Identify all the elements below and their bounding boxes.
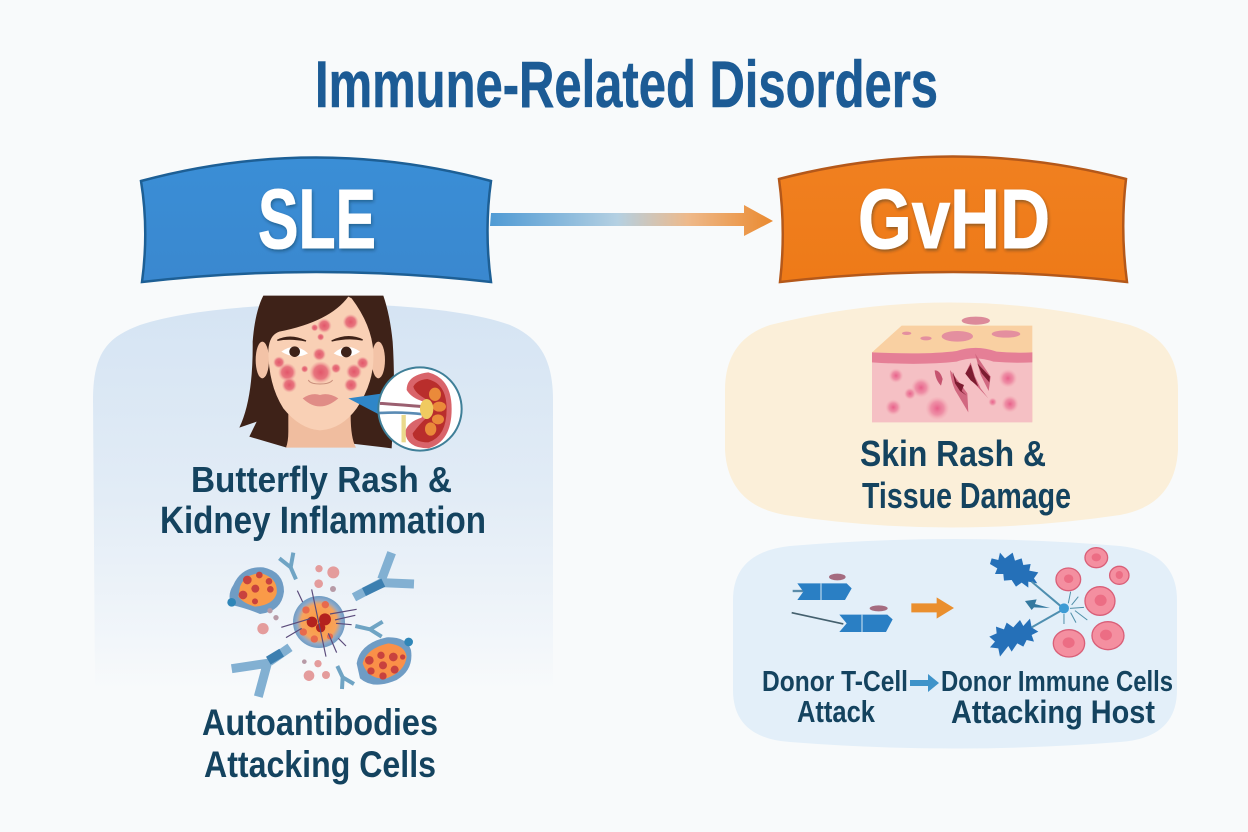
central cell [293,596,345,648]
banner label: GvHD: GvHD [858,172,1050,266]
caption: autoantibodies attacking cells: Attacking Cells [204,744,436,785]
banner: GvHD [779,156,1127,282]
arrow: SLE to GvHD [490,205,773,236]
orange arrow [911,597,954,619]
cell lower right [357,637,411,685]
caption: donor immune cells attacking host: Attacking Host [951,694,1155,730]
caption: butterfly rash and kidney inflammation: Butterfly Rash & [191,459,452,500]
caption: butterfly rash and kidney inflammation [160,459,486,542]
spiky donor cells [989,553,1038,657]
banner label: SLE: SLE [258,172,376,266]
caption: donor T-cell attack: Attack [797,694,876,729]
illustration: autoantibodies attacking cells [227,553,414,697]
caption: autoantibodies attacking cells: Autoantibodies [202,702,438,743]
caption: skin rash and tissue damage: Skin Rash & [860,433,1046,474]
caption: skin rash and tissue damage: Tissue Damage [862,475,1071,516]
cell upper left [230,567,284,614]
small arrow: T-cell to immune cells [910,674,939,692]
panel: SLE [93,296,553,785]
panel: donor T-cell attack [733,539,1177,748]
donor T-cells [792,574,893,632]
banner: SLE [141,158,491,282]
caption: butterfly rash and kidney inflammation: Kidney Inflammation [160,500,486,542]
blue pointer [348,393,383,417]
illustration: T-cells attacking host cells [792,548,1129,657]
title: Immune-Related Disorders [315,47,938,121]
caption: donor T-cell attack [762,666,908,729]
illustration: skin cross-section [872,317,1032,422]
panel: skin rash and tissue damage [725,302,1178,528]
caption: donor immune cells attacking host: Donor Immune Cells [941,666,1173,698]
caption: donor T-cell attack: Donor T-Cell [762,666,908,698]
caption: autoantibodies attacking cells [202,702,438,785]
illustration: face with butterfly rash and kidney [239,296,462,451]
cell fragments [257,565,339,681]
antibodies [232,553,414,697]
host cells [1053,548,1129,657]
skin tears [935,353,991,412]
caption: skin rash and tissue damage [860,433,1071,516]
caption: donor immune cells attacking host [941,666,1173,730]
